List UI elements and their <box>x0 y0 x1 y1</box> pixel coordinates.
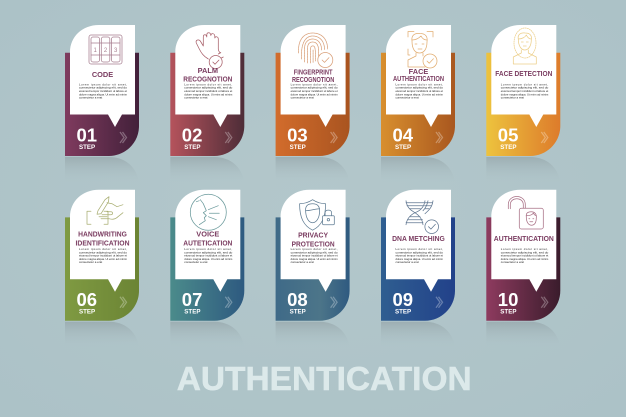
body text <box>396 82 444 100</box>
body text: dolore magna aliqua. Ut enim ad minim <box>396 92 444 96</box>
heading line 2: IDENTIFICATION <box>76 239 130 248</box>
reflection <box>276 157 350 183</box>
body text: Lorem ipsum dolor sit amet, <box>291 82 338 86</box>
body text: dolore magna aliqua. Ut enim ad minim <box>501 257 549 261</box>
icon: code keypad: 3 <box>114 48 118 54</box>
body text: Lorem ipsum dolor sit amet, <box>396 82 443 86</box>
body text: consectetur adipiscing elit, sed do <box>79 250 127 254</box>
body text: consectetur adipiscing elit, sed do <box>184 86 233 90</box>
body text: Lorem ipsum dolor sit amet, <box>501 82 548 86</box>
white speech card <box>70 190 135 292</box>
step number: 01 <box>76 124 97 146</box>
coloured panel <box>486 217 560 321</box>
white speech card <box>491 190 556 292</box>
body text: eiusmod tempor incididunt ut labore et <box>79 254 127 258</box>
card 06: handwriting identification <box>65 190 139 348</box>
reflection <box>276 322 350 348</box>
step number: 08 <box>287 289 308 310</box>
card 04: face authentication <box>381 25 455 183</box>
step label: STEP <box>290 144 306 151</box>
coloured panel <box>486 53 560 156</box>
coloured panel <box>381 53 455 156</box>
body text: eiusmod tempor incididunt ut labore et <box>184 254 232 258</box>
coloured panel <box>381 217 455 321</box>
icon: speaking head in circle <box>190 194 226 230</box>
body text: dolore magna aliqua. Ut enim ad minim <box>291 257 338 261</box>
card 10: authentication <box>486 190 560 348</box>
coloured panel <box>170 53 244 156</box>
chevrons <box>541 297 548 308</box>
heading: FINGERPRINT <box>294 68 333 76</box>
body text: consectetur adipiscing elit, sed do <box>184 250 233 254</box>
step label: STEP <box>395 144 411 151</box>
coloured panel <box>170 217 244 321</box>
body text <box>184 82 233 100</box>
card 03: fingerprint recognition <box>276 25 350 183</box>
body text <box>79 247 128 264</box>
body text: consectetur adipiscing elit, sed do <box>501 250 549 254</box>
heading: AUTHENTICATION <box>494 234 554 243</box>
heading line 2: RECOGNOTION <box>183 74 232 84</box>
step number: 06 <box>76 289 97 310</box>
card 02: palm recognition <box>170 25 244 183</box>
body text: dolore magna aliqua. Ut enim ad minim <box>184 92 233 96</box>
body text: consectetur a erat <box>291 260 314 264</box>
icon: shield with lock <box>300 200 334 230</box>
heading: FACE DETECTION <box>495 69 552 78</box>
body text: consectetur a erat <box>396 260 419 264</box>
chevrons <box>120 132 126 143</box>
chevrons <box>436 132 442 143</box>
body text <box>291 82 338 100</box>
white speech card <box>386 190 451 292</box>
body text: consectetur adipiscing elit, sed do <box>501 86 549 90</box>
body text: eiusmod tempor incididunt ut labore et <box>501 254 548 258</box>
body text <box>184 247 233 264</box>
icon: face scan with check <box>408 32 437 68</box>
heading: FACE <box>409 67 428 76</box>
white speech card <box>70 25 135 127</box>
body text: consectetur a erat <box>184 96 208 100</box>
body text: dolore magna aliqua. Ut enim ad minim <box>291 92 338 96</box>
reflection <box>486 157 560 183</box>
body text: dolore magna aliqua. Ut enim ad minim <box>79 92 128 96</box>
step label: STEP <box>79 144 95 151</box>
body text <box>79 82 128 100</box>
step label: STEP <box>184 144 200 151</box>
body text: eiusmod tempor incididunt ut labore et <box>184 89 232 93</box>
reflection <box>381 157 455 183</box>
step number: 07 <box>182 289 202 310</box>
step label: STEP <box>395 309 411 316</box>
step number: 02 <box>182 124 202 146</box>
step label: STEP <box>184 309 200 316</box>
body text: consectetur a erat <box>396 96 419 100</box>
reflection <box>170 157 244 183</box>
reflection <box>65 157 139 183</box>
body text: dolore magna aliqua. Ut enim ad minim <box>396 257 444 261</box>
body text: eiusmod tempor incididunt ut labore et <box>291 254 338 258</box>
coloured panel <box>276 53 350 156</box>
reflection <box>65 322 139 348</box>
card 01: code <box>65 25 139 183</box>
step label: STEP <box>500 144 516 151</box>
body text: Lorem ipsum dolor sit amet, <box>79 247 127 251</box>
body text <box>501 82 549 100</box>
chevrons <box>225 297 232 308</box>
body text <box>291 247 338 264</box>
step number: 09 <box>392 289 413 310</box>
icon: check badge <box>318 52 333 68</box>
body text: Lorem ipsum dolor sit amet, <box>79 82 127 86</box>
chevrons <box>331 132 337 143</box>
reflection <box>486 322 560 348</box>
icon: code keypad <box>89 35 122 64</box>
body text: dolore magna aliqua. Ut enim ad minim <box>501 92 549 96</box>
icon: fingerprint with check <box>299 33 328 63</box>
heading: HANDWRITING <box>78 230 127 239</box>
chevrons <box>331 297 337 308</box>
body text <box>501 247 549 264</box>
heading: CODE <box>92 70 113 79</box>
body text: Lorem ipsum dolor sit amet, <box>184 82 232 86</box>
step label: STEP <box>290 309 306 316</box>
body text: eiusmod tempor incididunt ut labore et <box>396 254 443 258</box>
body text: dolore magna aliqua. Ut enim ad minim <box>184 257 233 261</box>
reflection <box>170 322 244 348</box>
heading: DNA METCHING <box>392 234 445 243</box>
coloured panel <box>276 217 350 321</box>
step number: 03 <box>287 124 308 146</box>
body text: Lorem ipsum dolor sit amet, <box>396 247 443 251</box>
icon: padlock with face <box>508 196 543 229</box>
body text: consectetur a erat <box>291 96 314 100</box>
card 07: voice authentication <box>170 190 244 348</box>
body text: eiusmod tempor incididunt ut labore et <box>501 89 548 93</box>
body text: consectetur a erat <box>501 260 524 264</box>
icon: code keypad: 1 <box>94 48 98 54</box>
coloured panel <box>65 53 139 156</box>
body text: eiusmod tempor incididunt ut labore et <box>396 89 443 93</box>
body text: consectetur adipiscing elit, sed do <box>291 250 338 254</box>
body text: consectetur a erat <box>184 260 208 264</box>
white speech card <box>175 190 240 292</box>
step label: STEP <box>79 309 95 316</box>
step number: 05 <box>498 124 518 146</box>
body text: consectetur adipiscing elit, sed do <box>291 86 338 90</box>
body text: eiusmod tempor incididunt ut labore et <box>79 89 127 93</box>
body text: Lorem ipsum dolor sit amet, <box>501 247 548 251</box>
coloured panel <box>65 217 139 321</box>
heading: PRIVACY <box>298 231 328 240</box>
step number: 04 <box>392 124 414 146</box>
white speech card <box>281 25 346 127</box>
chevrons <box>120 297 126 308</box>
body text: consectetur adipiscing elit, sed do <box>396 86 443 90</box>
heading: PALM <box>198 66 218 75</box>
main title: AUTHENTICATION <box>177 361 472 398</box>
heading line 2: PROTECTION <box>292 240 335 249</box>
body text: Lorem ipsum dolor sit amet, <box>184 247 232 251</box>
body text: consectetur a erat <box>79 96 102 100</box>
heading line 2: AUTETICATION <box>183 239 232 248</box>
chevrons <box>436 297 442 308</box>
reflection <box>381 322 455 348</box>
white speech card <box>281 190 346 292</box>
body text: eiusmod tempor incididunt ut labore et <box>291 89 338 93</box>
body text <box>396 247 444 264</box>
white speech card <box>175 25 240 127</box>
body text: consectetur adipiscing elit, sed do <box>79 86 127 90</box>
chevrons <box>541 132 548 143</box>
body text: consectetur a erat <box>79 260 102 264</box>
body text: consectetur a erat <box>501 96 524 100</box>
icon: writing hand <box>87 197 123 224</box>
heading: VOICE <box>196 230 219 239</box>
card 09: dna matching <box>381 190 455 348</box>
icon: face detection oval <box>513 28 536 64</box>
icon: palm with check <box>196 33 223 68</box>
step number: 10 <box>498 289 518 310</box>
body text: dolore magna aliqua. Ut enim ad minim <box>79 257 128 261</box>
icon: dna helix with check <box>406 201 438 234</box>
step label: STEP <box>500 309 516 316</box>
heading line 2: RECOGNOTION <box>292 75 334 84</box>
white speech card <box>491 25 556 127</box>
body text: consectetur adipiscing elit, sed do <box>396 250 443 254</box>
card 05: face detection <box>486 25 560 183</box>
icon: code keypad: 2 <box>104 48 108 54</box>
chevrons <box>225 132 232 143</box>
body text: Lorem ipsum dolor sit amet, <box>291 247 338 251</box>
heading line 2: AUTHENTICATION <box>393 74 444 83</box>
white speech card <box>386 25 451 127</box>
card 08: privacy protection <box>276 190 350 348</box>
